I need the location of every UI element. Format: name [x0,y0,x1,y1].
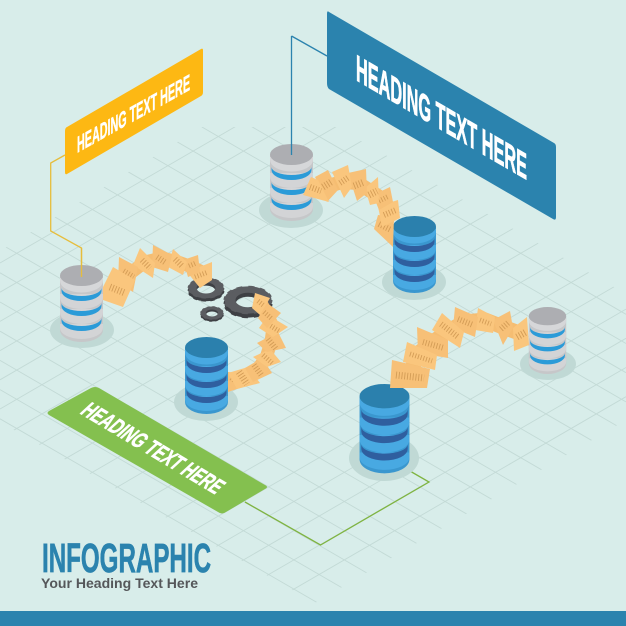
connector: blue heading to top grey database [292,36,327,56]
database group: large blue [349,384,419,481]
connector: yellow heading to grey database [51,155,82,277]
banner: yellow heading [65,49,203,174]
isometric floor grid [0,127,626,602]
gears [189,278,270,321]
database group: upper-right blue [382,216,446,300]
database group: left grey [50,248,114,348]
banner: yellow heading: HEADING TEXT HERE [77,70,190,159]
banner: green heading [48,387,267,514]
banner: green heading: HEADING TEXT HERE [75,399,231,499]
document chain: top grey to upper blue [303,165,400,247]
document chain: left grey to lower blue [103,245,288,392]
subtitle: Your Heading Text Here [41,576,199,591]
database group: right grey [520,307,576,380]
banner: blue heading [327,11,556,220]
database group: lower-left blue [174,337,238,421]
database group: top grey [259,36,323,228]
connector: green heading to large blue database [245,467,429,545]
bottom bar [0,611,626,626]
document chain: right grey to large blue [390,307,529,388]
title: INFOGRAPHIC [42,535,211,581]
